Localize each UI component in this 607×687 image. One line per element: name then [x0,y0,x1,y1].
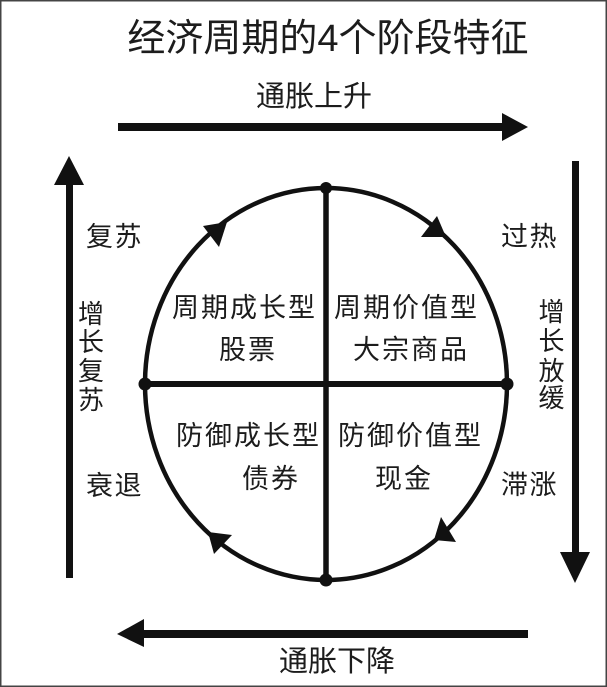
label: growth recovering: 长 [78,327,104,357]
node: right [500,378,514,390]
label: growth recovering: 增 [78,299,104,329]
quadrant: defensive growth: 债券 [242,464,300,494]
quadrant: cyclical value [334,293,479,365]
quadrant: defensive value: 防御价值型 [338,421,483,451]
arrowhead: bottom left [208,532,232,554]
arrowhead: top left [203,222,227,247]
quadrant: defensive growth: 防御成长型 [176,421,321,451]
cycle diagram [138,182,514,586]
quadrant: defensive value: 现金 [375,464,433,494]
label: growth slowing: 长 [538,326,565,356]
title: 经济周期的4个阶段特征 [127,18,529,60]
node: top [320,182,332,194]
label: recession: 衰退 [86,471,143,501]
label: growth recovering [78,299,104,415]
circle [145,188,507,580]
label: growth recovering: 苏 [78,385,104,415]
arrowhead: top right [421,216,446,237]
node: left [138,378,152,390]
horizontal axis [145,381,507,387]
quadrant: defensive growth [176,421,321,494]
node: bottom [320,574,332,586]
arrow: bottom left [117,619,528,647]
label: growth slowing: 增 [538,297,565,327]
label: growth slowing [538,297,565,413]
quadrant: cyclical value: 周期价值型 [334,293,479,323]
quadrant: defensive value [338,421,483,494]
label: inflation rising: 通胀上升 [256,81,372,113]
label: growth slowing: 缓 [538,383,565,413]
arrow: left up [54,156,84,578]
label: overheating: 过热 [501,222,558,252]
quadrant: cyclical growth [172,293,317,365]
arrow: top right [118,113,528,141]
label: recovery: 复苏 [86,222,143,252]
quadrant: cyclical value: 大宗商品 [353,335,469,365]
arrow: right down [560,161,590,583]
label: stagflation: 滞涨 [501,470,558,500]
label: growth slowing: 放 [538,356,565,386]
label: growth recovering: 复 [78,356,104,386]
vertical axis [323,188,329,580]
quadrant: cyclical growth: 周期成长型 [172,293,317,323]
label: inflation falling: 通胀下降 [279,645,395,678]
quadrant: cyclical growth: 股票 [219,335,277,365]
arrowhead: bottom right [434,517,456,542]
